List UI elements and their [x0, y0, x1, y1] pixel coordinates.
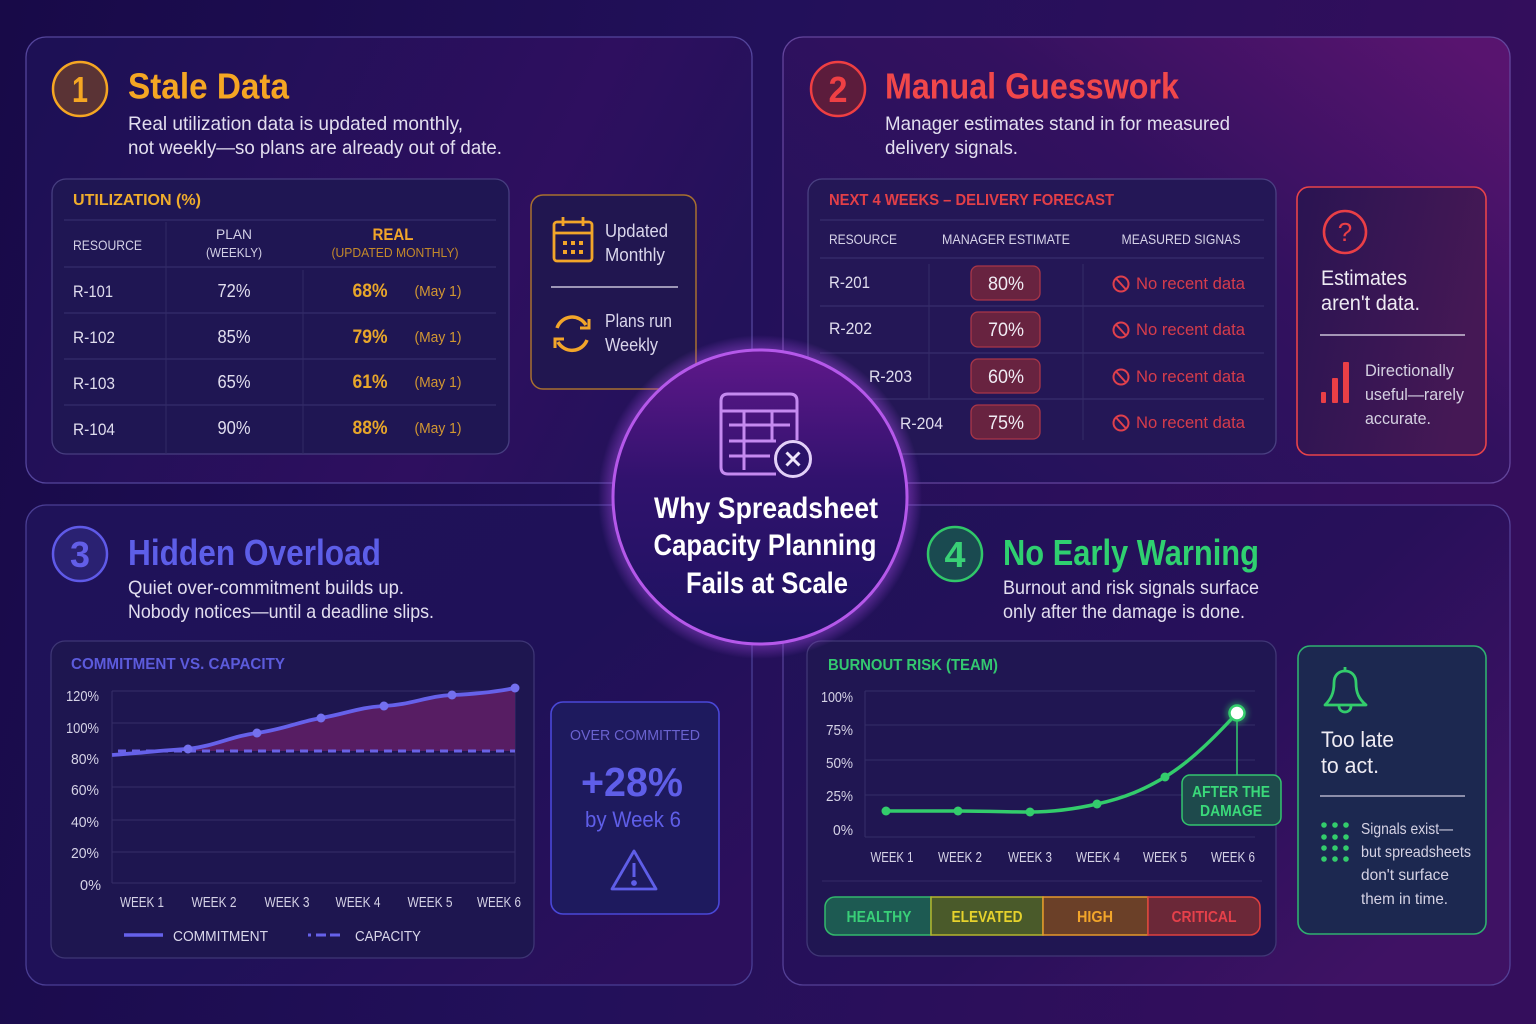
description: Quiet over-commitment builds up. [128, 577, 404, 599]
rows: (May 1) [414, 420, 462, 437]
week labels: WEEK 6 [1211, 850, 1255, 866]
axis labels [66, 688, 101, 894]
risk scale: HIGH [1077, 909, 1113, 926]
rows: 61% [352, 372, 388, 393]
rows: R-101 [73, 282, 113, 301]
icon: warning [612, 851, 656, 889]
description [1003, 577, 1259, 623]
heading: stale data: Stale Data [128, 66, 290, 106]
chart: commitment vs capacity: COMMITMENT VS. CAPACITY [71, 656, 286, 673]
callout: updated monthly: Monthly [605, 245, 665, 265]
rows: 90% [218, 418, 250, 438]
week labels: WEEK 5 [1143, 850, 1187, 866]
week labels: WEEK 3 [1008, 850, 1052, 866]
table: delivery forecast: RESOURCE [829, 231, 897, 247]
estimate pills: 80% [988, 274, 1024, 295]
callout: estimates aren't data: Estimates [1321, 267, 1407, 290]
icon: refresh [555, 317, 589, 350]
rows: R-102 [73, 328, 115, 347]
axis labels: 0% [80, 877, 101, 894]
description [128, 113, 502, 159]
capacity line [118, 750, 515, 752]
chart: burnout risk: BURNOUT RISK (TEAM) [828, 657, 998, 674]
callout: over committed: +28% [581, 759, 683, 805]
legend: CAPACITY [355, 928, 421, 945]
badge: 4: 4 [944, 534, 966, 575]
table: utilization: RESOURCE [73, 237, 142, 253]
estimate pills: 75% [988, 413, 1024, 434]
title: Fails at Scale [686, 567, 848, 600]
callout: updated monthly: Plans run [605, 311, 672, 331]
badge: 1: 1 [72, 69, 88, 110]
table: delivery forecast: MEASURED SIGNAS [1122, 231, 1240, 247]
axis labels: 80% [71, 751, 99, 768]
risk scale [825, 897, 1260, 935]
rows: 68% [352, 281, 388, 302]
chart: burnout risk: 0% [833, 822, 853, 839]
badge: 3 [53, 527, 107, 581]
chart: commitment vs capacity [51, 641, 534, 958]
rows [73, 281, 462, 439]
callout: too late to act: to act. [1321, 753, 1379, 778]
table: utilization [52, 179, 509, 454]
title [654, 492, 878, 600]
overload area [160, 688, 515, 751]
no recent data signals: No recent data [1136, 367, 1246, 386]
heading: no early warning: No Early Warning [1003, 532, 1259, 573]
table: utilization: (WEEKLY) [206, 246, 262, 260]
icon: question mark: ? [1338, 217, 1352, 247]
callout: updated monthly: Updated [605, 221, 668, 241]
description: Real utilization data is updated monthly, [128, 113, 463, 135]
rows: 88% [352, 418, 388, 439]
risk scale: HEALTHY [846, 909, 912, 926]
week labels [120, 895, 521, 911]
heading: hidden overload: Hidden Overload [128, 532, 381, 573]
icon: calendar [554, 217, 592, 261]
badge: 1 [53, 62, 107, 116]
badge: 4 [928, 527, 982, 581]
callout: estimates aren't data: aren't data. [1321, 292, 1420, 315]
week labels: WEEK 5 [408, 895, 452, 911]
description: Manager estimates stand in for measured [885, 113, 1230, 135]
chart: burnout risk [807, 641, 1281, 956]
axis labels: 20% [71, 845, 99, 862]
axis labels: 40% [71, 814, 99, 831]
estimate pills: 70% [988, 320, 1024, 341]
rows: R-103 [73, 374, 115, 393]
commitment line [112, 684, 520, 755]
week labels: WEEK 2 [938, 850, 982, 866]
callout: estimates aren't data [1297, 187, 1486, 455]
axis labels: 60% [71, 782, 99, 799]
panel: no early warning [783, 505, 1510, 985]
rows: 72% [218, 281, 250, 301]
table: delivery forecast: MANAGER ESTIMATE [942, 231, 1070, 247]
icon: bars [1321, 362, 1349, 403]
heading: manual guesswork: Manual Guesswork [885, 66, 1180, 106]
title: Why Spreadsheet [654, 492, 878, 525]
estimate pills [971, 266, 1040, 439]
callout: too late to act [1298, 646, 1486, 934]
panel: stale data [26, 37, 752, 483]
title: Capacity Planning [654, 529, 876, 562]
callout: too late to act: them in time. [1361, 891, 1448, 908]
panel: manual guesswork [783, 37, 1510, 483]
no recent data signals: No recent data [1136, 274, 1246, 293]
icon: spreadsheet with x [721, 394, 810, 476]
rows: (May 1) [414, 374, 462, 391]
rows: 85% [218, 327, 250, 347]
table: utilization: (UPDATED MONTHLY) [332, 245, 458, 260]
callout: too late to act: Signals exist— [1361, 821, 1453, 838]
chart: burnout risk: 25% [826, 788, 853, 805]
description: delivery signals. [885, 137, 1018, 159]
risk curve [882, 702, 1248, 816]
callout: updated monthly: Weekly [605, 335, 658, 355]
callout: over committed [551, 702, 719, 914]
table: delivery forecast [808, 179, 1276, 454]
table: utilization: PLAN [216, 226, 252, 242]
badge: 3: 3 [70, 534, 90, 575]
axis labels: 100% [66, 720, 99, 737]
description: not weekly—so plans are already out of date. [128, 137, 502, 159]
icon: question mark [1324, 211, 1366, 253]
callout: estimates aren't data: accurate. [1365, 409, 1431, 428]
week labels: WEEK 1 [870, 850, 914, 866]
callout: over committed: OVER COMMITTED [570, 727, 700, 744]
description: Burnout and risk signals surface [1003, 577, 1259, 599]
rows: (May 1) [414, 283, 462, 300]
week labels: WEEK 3 [264, 895, 310, 911]
table: delivery forecast: R-203 [869, 367, 912, 386]
callout: after the damage [1182, 775, 1281, 825]
legend: COMMITMENT [173, 928, 268, 945]
description [128, 577, 434, 623]
table: delivery forecast: R-201 [829, 273, 870, 292]
week labels: WEEK 4 [336, 895, 380, 911]
callout: estimates aren't data: useful—rarely [1365, 385, 1464, 404]
table: delivery forecast: NEXT 4 WEEKS – DELIVERY FORECAST [829, 192, 1114, 209]
no recent data signals: No recent data [1136, 413, 1246, 432]
table: utilization: UTILIZATION (%) [73, 192, 201, 209]
week labels: WEEK 6 [477, 895, 521, 911]
table: utilization: REAL [372, 225, 414, 244]
table: delivery forecast: R-204 [900, 414, 943, 433]
description: only after the damage is done. [1003, 601, 1245, 623]
callout: updated monthly [531, 195, 696, 389]
callout: over committed: by Week 6 [585, 807, 681, 832]
rows: (May 1) [414, 329, 462, 346]
chart: burnout risk: 50% [826, 755, 853, 772]
callout: too late to act: but spreadsheets [1361, 844, 1471, 861]
risk scale: CRITICAL [1172, 909, 1237, 926]
estimate pills: 60% [988, 367, 1024, 388]
week labels: WEEK 2 [192, 895, 236, 911]
rows: R-104 [73, 420, 115, 439]
panel: hidden overload [26, 505, 752, 985]
central badge [598, 335, 922, 659]
icon: signal dots [1321, 822, 1349, 862]
rows: 65% [218, 372, 250, 392]
table: delivery forecast: R-202 [829, 319, 872, 338]
week labels [870, 850, 1255, 866]
week labels: WEEK 1 [120, 895, 164, 911]
legend [124, 928, 421, 945]
badge: 2: 2 [828, 69, 848, 110]
rows: 79% [352, 327, 388, 348]
callout: too late to act: don't surface [1361, 867, 1449, 884]
callout: after the damage: DAMAGE [1200, 803, 1262, 820]
badge: 2 [811, 62, 865, 116]
chart: burnout risk: 100% [821, 689, 853, 706]
risk scale: ELEVATED [952, 909, 1022, 926]
week labels: WEEK 4 [1076, 850, 1120, 866]
no recent data signals [1114, 274, 1246, 432]
callout: too late to act: Too late [1321, 727, 1394, 752]
description: Nobody notices—until a deadline slips. [128, 601, 434, 623]
icon: bell [1325, 667, 1366, 712]
no recent data signals: No recent data [1136, 320, 1246, 339]
callout: estimates aren't data: Directionally [1365, 361, 1454, 380]
callout: after the damage: AFTER THE [1192, 784, 1270, 801]
chart: burnout risk: 75% [826, 722, 853, 739]
axis labels: 120% [66, 688, 99, 705]
description [885, 113, 1230, 159]
